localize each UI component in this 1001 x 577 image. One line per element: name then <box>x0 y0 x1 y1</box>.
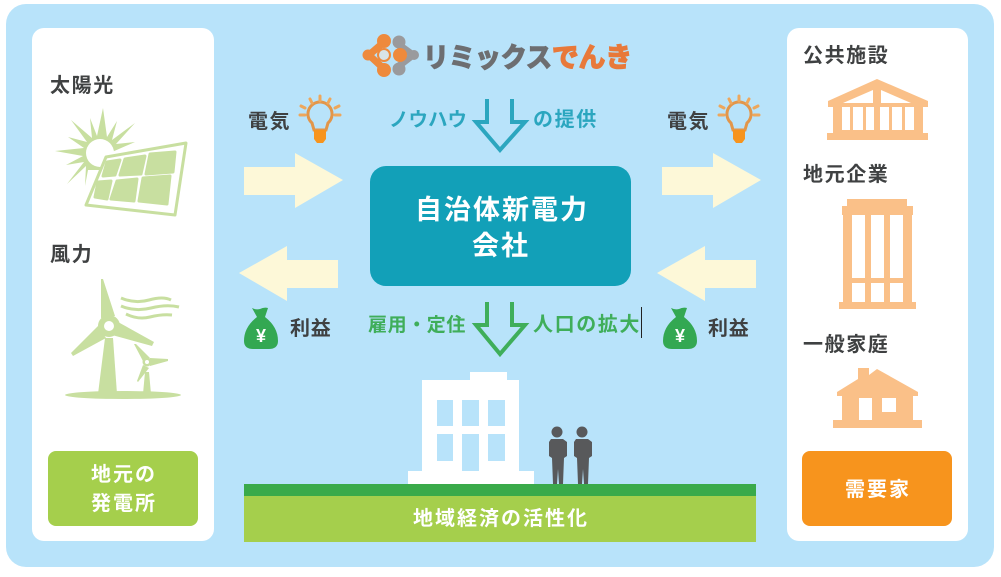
central box: municipal power company: 自治体新電力 <box>415 195 589 225</box>
arrow: electricity to consumers <box>662 153 761 208</box>
text: provision of: の提供 <box>533 108 598 131</box>
icon: public building <box>827 79 928 140</box>
left: electricity label: 電気 <box>248 110 291 133</box>
heading: wind: 風力 <box>50 243 93 266</box>
arrow: know-how down <box>476 99 525 150</box>
arrow: profit to plants <box>239 246 338 301</box>
icon: two people <box>549 426 592 484</box>
text: jobs and settlement: 雇用・定住 <box>368 314 466 336</box>
icon: house <box>833 368 922 428</box>
central box: municipal power company: 会社 <box>472 231 530 261</box>
text: know-how: ノウハウ <box>389 109 467 131</box>
icon: white building <box>408 372 534 484</box>
icon: wind turbines <box>65 279 181 399</box>
text: population growth: 人口の拡大 <box>533 313 641 336</box>
heading: public facilities: 公共施設 <box>803 44 889 67</box>
label box: local power plant: 地元の <box>91 463 157 486</box>
icon: money bag left: ¥ <box>256 326 266 346</box>
icon: logo mark <box>362 34 419 77</box>
icon: office tower <box>839 199 916 309</box>
icon: money bag right: ¥ <box>675 326 685 346</box>
logo: Remix Denki: リミックス <box>423 43 552 73</box>
logo: Remix Denki <box>362 34 632 77</box>
label box: consumers: 需要家 <box>845 478 911 501</box>
icon: light bulb left <box>300 96 340 143</box>
panel: consumers <box>787 28 968 541</box>
icon: solar panel and sun <box>55 108 186 215</box>
heading: local companies: 地元企業 <box>803 163 889 186</box>
icon: light bulb right <box>719 96 759 143</box>
arrow: regional benefit down <box>476 302 525 354</box>
left: profit label: 利益 <box>290 317 331 340</box>
right: profit label: 利益 <box>708 317 749 340</box>
icon: money bag right <box>663 308 697 349</box>
label box: local power plant <box>48 451 198 526</box>
arrow: profit from consumers <box>657 246 756 301</box>
right: electricity label: 電気 <box>667 110 710 133</box>
panel: local power plants <box>32 28 214 541</box>
ground band: regional revitalisation <box>244 484 756 542</box>
text cursor <box>641 307 642 338</box>
central box: municipal power company <box>370 166 631 286</box>
logo: Remix Denki: でんき <box>552 43 632 73</box>
heading: households: 一般家庭 <box>803 333 889 356</box>
arrow: electricity from plants <box>244 153 343 208</box>
icon: money bag left <box>244 308 278 349</box>
ground band: regional revitalisation: 地域経済の活性化 <box>413 507 589 530</box>
label box: local power plant: 発電所 <box>91 492 157 515</box>
label box: consumers <box>802 451 952 526</box>
heading: solar: 太陽光 <box>50 74 115 97</box>
